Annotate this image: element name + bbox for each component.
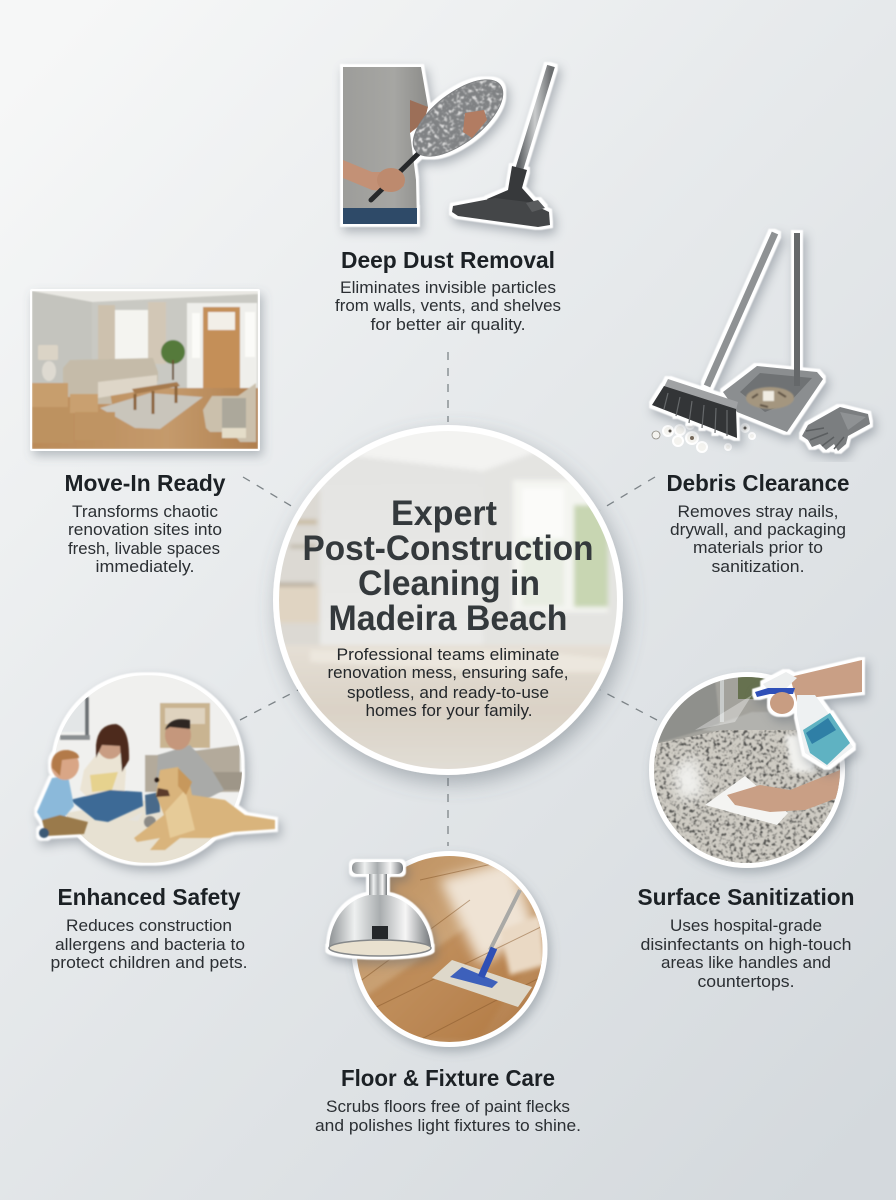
heading: Floor & Fixture Care: Floor & Fixture Care: [341, 1065, 555, 1091]
text: Enhanced Safety description: allergens and bacteria to: [55, 935, 245, 954]
text: Surface Sanitization description: Uses hospital-grade: [670, 916, 822, 935]
torso with duster: [343, 65, 516, 224]
text: Deep Dust Removal description: [335, 278, 561, 334]
title: Cleaning in: [358, 564, 540, 603]
subtitle: Professional teams eliminate: [336, 645, 560, 664]
icon: countertop sanitization: [649, 660, 862, 870]
dashed connector lines: [240, 352, 657, 846]
text: Enhanced Safety description: Reduces construction: [66, 916, 232, 935]
wood floor circle with mop: [350, 850, 550, 1050]
subtitle: renovation mess, ensuring safe,: [328, 663, 568, 682]
woman and man: [70, 719, 224, 828]
text: Debris Clearance description: sanitization.: [712, 557, 804, 576]
text: Debris Clearance description: drywall, and packaging: [670, 520, 846, 539]
text: Move-In Ready description: Transforms chaotic: [72, 502, 218, 521]
title: [302, 494, 594, 638]
spray mist: [695, 695, 752, 730]
text: Surface Sanitization description: countertops.: [698, 972, 794, 991]
text: Deep Dust Removal description: from walls, vents, and shelves: [335, 296, 561, 315]
work gloves: [802, 407, 870, 451]
icon: floor and light fixture: [329, 850, 550, 1050]
text: Surface Sanitization description: [640, 916, 852, 991]
heading: Surface Sanitization: Surface Sanitization: [638, 884, 854, 910]
granite counter circle: [649, 672, 850, 870]
text: Floor & Fixture Care description: Scrubs floors free of paint flecks: [326, 1097, 570, 1116]
icon: duster and vacuum: [343, 65, 551, 227]
icon: broom, dustpan and gloves: [652, 233, 870, 452]
heading: Deep Dust Removal: Deep Dust Removal: [341, 247, 555, 273]
child: [37, 750, 88, 838]
vacuum cleaner: [452, 66, 551, 227]
title: Expert: [391, 494, 497, 533]
text: Floor & Fixture Care description: [315, 1097, 581, 1135]
heading: Move-In Ready: Move-In Ready: [64, 470, 226, 496]
icon: move-in room photo: [30, 289, 260, 451]
panel: central hub: [273, 425, 623, 775]
central circle photo: [273, 425, 623, 775]
text: Move-In Ready description: fresh, livable spaces: [68, 539, 220, 558]
text: Enhanced Safety description: protect children and pets.: [50, 953, 247, 972]
title: Madeira Beach: [328, 599, 568, 638]
text: Surface Sanitization description: disinfectants on high-touch: [640, 935, 852, 954]
text: Floor & Fixture Care description: and polishes light fixtures to shine.: [315, 1116, 581, 1135]
spray bottle and arm: [755, 660, 862, 767]
debris pieces: [652, 421, 755, 452]
text: Surface Sanitization description: areas like handles and: [661, 953, 831, 972]
text: Move-In Ready description: renovation sites into: [68, 520, 222, 539]
broom and dustpan: [652, 233, 823, 438]
text: Move-In Ready description: [68, 502, 222, 576]
title: Post-Construction: [302, 529, 594, 568]
subtitle: homes for your family.: [366, 701, 532, 720]
text: Enhanced Safety description: [50, 916, 247, 972]
heading: Enhanced Safety: Enhanced Safety: [58, 884, 241, 910]
room backdrop: [54, 675, 245, 863]
text: Deep Dust Removal description: for better air quality.: [370, 315, 526, 334]
text: Deep Dust Removal description: Eliminates invisible particles: [340, 278, 556, 297]
icon: family with dog: [37, 675, 275, 863]
text: Move-In Ready description: immediately.: [96, 557, 194, 576]
subtitle: spotless, and ready-to-use: [347, 683, 549, 702]
heading: Debris Clearance: Debris Clearance: [666, 470, 850, 496]
text: Debris Clearance description: materials prior to: [693, 538, 823, 557]
golden retriever: [134, 767, 275, 850]
chrome light fixture: [329, 862, 431, 956]
text: Debris Clearance description: [670, 502, 846, 576]
text: Debris Clearance description: Removes stray nails,: [678, 502, 838, 521]
subtitle: [328, 645, 568, 720]
